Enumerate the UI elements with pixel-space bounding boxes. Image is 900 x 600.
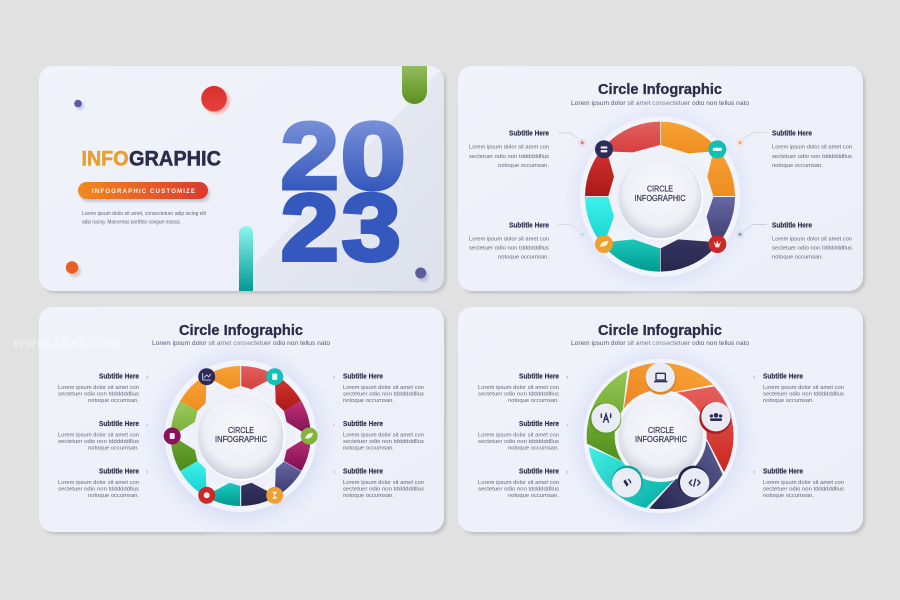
teal bar xyxy=(239,226,253,291)
text block: top right: notoque occumsan. xyxy=(772,163,823,169)
text block: right 2: Lorem ipsum dolor sit amet con xyxy=(763,480,844,486)
hub label: CIRCLE xyxy=(648,426,674,435)
text block: top left: notoque occumsan. xyxy=(498,163,549,169)
text block: right 1: sectetuer odio non tddddddllus xyxy=(763,392,844,398)
segment: red upper right xyxy=(275,375,301,411)
icon: code badge xyxy=(678,466,709,497)
text block: right 3: sectetuer odio non tddddddllus xyxy=(343,486,424,492)
text block: left 2: sectetuer odio non tddddddllus xyxy=(58,439,139,445)
text block: right 1 xyxy=(763,374,844,404)
text block: left 3: Lorem ipsum dolor sit amet con xyxy=(58,480,139,486)
panel: cover 2023 xyxy=(39,66,446,294)
title INFOGRAPHIC: GRAPHIC xyxy=(129,147,221,170)
text block: right 3: Lorem ipsum dolor sit amet con xyxy=(343,480,424,486)
title INFOGRAPHIC: INFO xyxy=(82,147,128,170)
text block: top right: Lorem ipsum dolor sit amet con xyxy=(772,144,852,150)
text block: left 2: Subtitle Here xyxy=(99,421,139,428)
segment: cyan xyxy=(180,461,206,497)
text block: left 2: notoque occumsan. xyxy=(508,446,559,452)
description xyxy=(82,211,206,226)
text block: left 2: sectetuer odio non tddddddllus xyxy=(478,439,559,445)
hub label xyxy=(634,184,686,203)
hub label: CIRCLE xyxy=(228,426,254,435)
text block: left 3: notoque occumsan. xyxy=(508,493,559,499)
heading: Circle Infographic xyxy=(598,82,722,98)
hub label: INFOGRAPHIC xyxy=(635,435,687,444)
text block: bottom right: Lorem ipsum dolor sit amet con xyxy=(772,236,852,242)
icon: red badge xyxy=(198,487,215,504)
text block: left 2 xyxy=(478,421,559,452)
text block: right 2: notoque occumsan. xyxy=(343,446,394,452)
hub label: INFOGRAPHIC xyxy=(215,435,267,444)
text block: right 2: notoque occumsan. xyxy=(763,493,814,499)
text block: left 1: Subtitle Here xyxy=(519,374,559,380)
text block: left 1: notoque occumsan. xyxy=(88,398,139,404)
text block: right 1: Subtitle Here xyxy=(343,374,383,380)
chevron markers: ‹ xyxy=(753,469,756,476)
text block: left 2: Subtitle Here xyxy=(519,421,559,428)
text block: bottom right: sectetuer odio non tddddddllus xyxy=(772,246,852,252)
text block: bottom right: notoque occumsan. xyxy=(772,254,823,260)
text block: right 1: Lorem ipsum dolor sit amet con xyxy=(763,385,844,391)
text block: bottom left: sectetuer odio non tddddddllus xyxy=(469,246,549,252)
text block: left 3: notoque occumsan. xyxy=(88,493,139,499)
orange ball xyxy=(66,261,81,277)
text block: top left: sectetuer odio non tddddddllus xyxy=(469,154,549,160)
chevron markers: ‹ xyxy=(753,374,756,381)
text block: left 2: Lorem ipsum dolor sit amet con xyxy=(478,432,559,438)
green tab xyxy=(402,66,427,104)
text block: left 2: notoque occumsan. xyxy=(88,446,139,452)
text block: left 3: sectetuer odio non tddddddllus xyxy=(58,486,139,492)
text block: left 3: Subtitle Here xyxy=(99,468,139,476)
chevron markers: › xyxy=(566,422,569,429)
red ball xyxy=(201,86,230,114)
chevron markers: › xyxy=(146,422,149,429)
description: adip iscing. Maecenas porttitor congue massa. xyxy=(82,220,181,226)
text block: right 1: Subtitle Here xyxy=(763,374,803,380)
chevron markers xyxy=(566,374,756,476)
chevron markers: › xyxy=(566,374,569,381)
segment: orange left xyxy=(180,375,206,411)
text block: right 3: Subtitle Here xyxy=(343,468,383,476)
year 2023: 2 xyxy=(281,175,339,281)
chevron markers: › xyxy=(146,469,149,476)
segment: orange top xyxy=(206,366,240,389)
text block: bottom left xyxy=(469,222,549,260)
text block: bottom left: Subtitle Here xyxy=(509,222,549,230)
text block: bottom left: notoque occumsan. xyxy=(498,254,549,260)
segment: red xyxy=(673,386,734,472)
connector: bottom right xyxy=(736,224,767,238)
spiral circle chart xyxy=(557,335,764,541)
text block: left 3: Lorem ipsum dolor sit amet con xyxy=(478,480,559,486)
text block: top left: Subtitle Here xyxy=(509,130,549,138)
icon: antenna badge xyxy=(589,403,621,435)
segment: orange top xyxy=(661,122,717,153)
text block: right 2 xyxy=(343,421,424,452)
text block: right 3: notoque occumsan. xyxy=(343,493,394,499)
text block: left 1 xyxy=(478,374,559,404)
text block: left 1: sectetuer odio non tddddddllus xyxy=(478,392,559,398)
pill button: INFOGRAPHIC CUSTOMIZE xyxy=(92,188,195,195)
chevron markers: ‹ xyxy=(333,374,336,381)
segment: magenta upper xyxy=(284,401,311,436)
text block: top right: sectetuer odio non tddddddllus xyxy=(772,154,852,160)
icon: green badge xyxy=(301,428,318,444)
subheading: Lorem ipsum dolor sit amet consectetuer odio non tellus nato xyxy=(571,101,750,107)
text block: top left xyxy=(469,130,549,169)
segment: dark green xyxy=(171,436,197,471)
subheading: Lorem ipsum dolor sit amet consectetuer odio non tellus nato xyxy=(571,341,750,347)
text block: left 1 xyxy=(58,374,139,404)
text block: bottom left: Lorem ipsum dolor sit amet con xyxy=(469,236,549,242)
connector: bottom left xyxy=(558,224,586,238)
year 2023: 2 xyxy=(281,104,339,210)
hub label: INFOGRAPHIC xyxy=(634,194,686,203)
segment: navy bottom xyxy=(661,239,717,272)
chevron markers: › xyxy=(146,374,149,381)
icon: navy badge xyxy=(198,368,215,385)
icon: orange badge xyxy=(266,487,283,504)
circle chart xyxy=(138,335,344,541)
panel: circle infographic spiral xyxy=(458,307,866,541)
hub label: CIRCLE xyxy=(647,184,673,194)
panel: circle infographic four sections xyxy=(458,66,866,302)
icon: teal badge xyxy=(266,368,283,385)
text block: left 1: Subtitle Here xyxy=(99,374,139,380)
segment: cyan left xyxy=(585,197,614,250)
heading: Circle Infographic xyxy=(179,323,303,339)
segment: light green xyxy=(171,401,197,436)
text block: left 1: sectetuer odio non tddddddllus xyxy=(58,392,139,398)
icon: red badge xyxy=(708,235,726,253)
icon: navy badge xyxy=(595,140,613,158)
text block: left 3 xyxy=(58,468,139,499)
text block: right 2: sectetuer odio non tddddddllus xyxy=(763,486,844,492)
segment: purple xyxy=(275,462,301,497)
text block: left 1: Lorem ipsum dolor sit amet con xyxy=(58,385,139,391)
segment: red top xyxy=(603,122,660,152)
text block: left 1: Lorem ipsum dolor sit amet con xyxy=(478,385,559,391)
infographic canvas xyxy=(14,66,866,535)
chevron markers: › xyxy=(566,469,569,476)
segment: navy xyxy=(649,437,723,509)
chevron markers: ‹ xyxy=(333,422,336,429)
circle chart xyxy=(557,95,763,302)
year 2023: 0 xyxy=(341,104,406,210)
text block: bottom right: Subtitle Here xyxy=(772,222,812,230)
text block: left 2 xyxy=(58,421,139,452)
text block: right 2: Subtitle Here xyxy=(343,421,383,428)
segment: orange xyxy=(623,363,713,411)
text block: right 1: Lorem ipsum dolor sit amet con xyxy=(343,385,424,391)
panel: circle infographic six sections xyxy=(39,307,446,541)
text block: right 2: Lorem ipsum dolor sit amet con xyxy=(343,432,424,438)
icon: people badge xyxy=(699,402,731,434)
segment: teal xyxy=(206,483,240,506)
text block: top right: Subtitle Here xyxy=(772,130,812,138)
text block: left 3: sectetuer odio non tddddddllus xyxy=(478,486,559,492)
hub xyxy=(618,155,703,240)
hub xyxy=(615,390,707,482)
connector: top right xyxy=(736,132,767,147)
year 2023 xyxy=(281,104,406,281)
text block: right 3 xyxy=(343,468,424,499)
text block: top left: Lorem ipsum dolor sit amet con xyxy=(469,144,549,150)
title INFOGRAPHIC xyxy=(82,147,221,170)
segment: navy xyxy=(241,483,276,506)
icon: magenta badge xyxy=(164,428,181,444)
icon: teal badge xyxy=(708,140,726,158)
hub label xyxy=(635,426,687,444)
text block: right 2 xyxy=(763,468,844,499)
text block: left 2: Lorem ipsum dolor sit amet con xyxy=(58,432,139,438)
icon: laptop badge xyxy=(645,363,676,395)
hub label xyxy=(215,426,267,444)
segment: teal bottom xyxy=(603,239,660,272)
text block: right 1: notoque occumsan. xyxy=(763,398,814,404)
chevron markers: ‹ xyxy=(333,469,336,476)
watermark: www.25xt.com xyxy=(12,334,121,350)
hub xyxy=(197,393,285,481)
icon: orange badge xyxy=(595,235,613,253)
diagonal glass shape xyxy=(253,72,444,291)
segment: teal xyxy=(589,447,676,508)
chevron markers xyxy=(146,374,336,476)
segment: purple right xyxy=(707,197,735,250)
text block: right 2: sectetuer odio non tddddddllus xyxy=(343,439,424,445)
text block: right 2: Subtitle Here xyxy=(763,468,803,476)
text block: bottom right xyxy=(772,222,852,260)
icon: signal badge xyxy=(612,466,643,497)
purple ball bottom right xyxy=(415,268,428,282)
small purple ball xyxy=(74,100,84,110)
description: Lorem ipsum dolor sit amet, consectetuer adip iscing elit xyxy=(82,211,206,217)
text block: right 1: notoque occumsan. xyxy=(343,398,394,404)
heading: Circle Infographic xyxy=(598,323,722,339)
text block: left 3: Subtitle Here xyxy=(519,468,559,476)
segment: orange right xyxy=(707,144,735,196)
segment: dark red left xyxy=(585,144,614,196)
subheading: Lorem ipsum dolor sit amet consectetuer odio non tellus nato xyxy=(152,341,331,347)
text block: top right xyxy=(772,130,852,169)
segment: red top xyxy=(241,366,276,389)
connector: top left xyxy=(558,133,586,147)
pill button xyxy=(78,182,210,202)
year 2023: 3 xyxy=(342,175,401,281)
text block: left 1: notoque occumsan. xyxy=(508,398,559,404)
text block: right 1: sectetuer odio non tddddddllus xyxy=(343,392,424,398)
text block: left 3 xyxy=(478,468,559,499)
text block: right 1 xyxy=(343,374,424,404)
segment: green xyxy=(587,371,627,463)
segment: magenta lower xyxy=(284,436,311,471)
